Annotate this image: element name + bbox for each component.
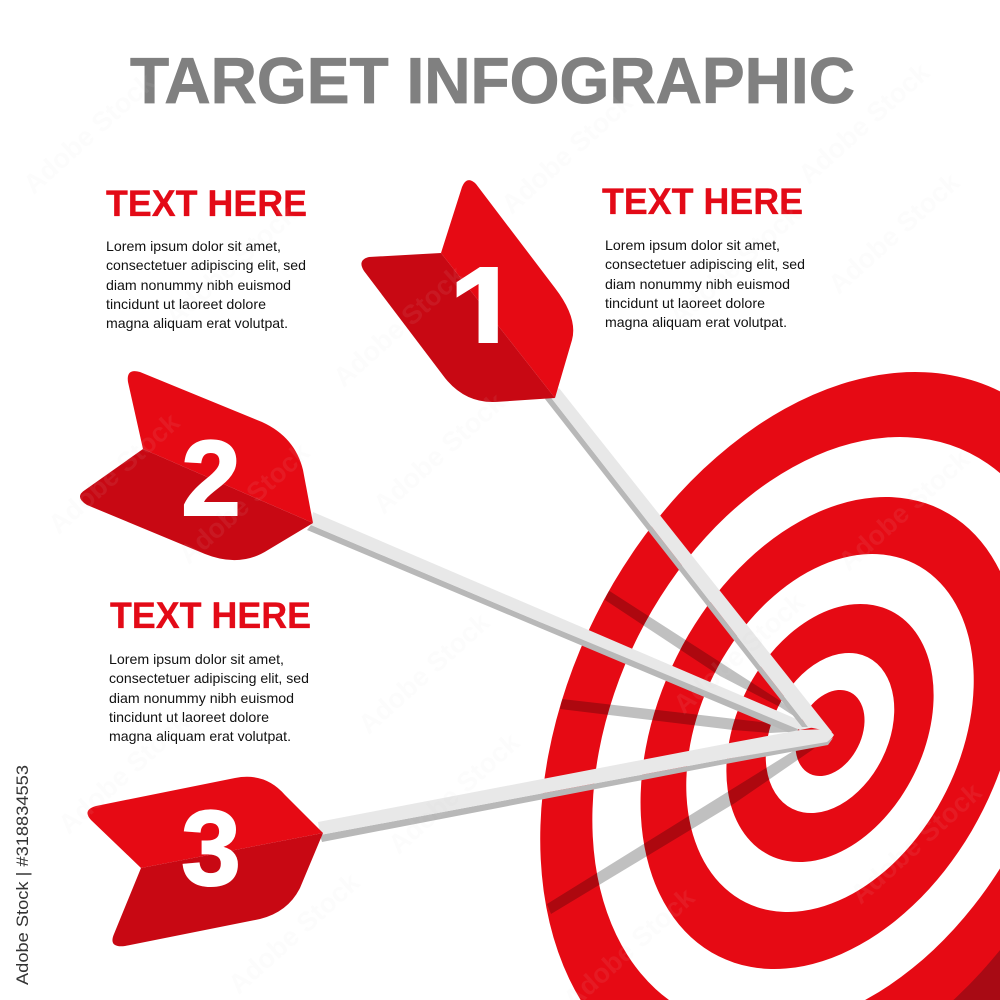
body: top left: consectetuer adipiscing elit, sed bbox=[106, 257, 306, 273]
text block: middle left bbox=[109, 594, 311, 744]
body: top left: diam nonummy nibh euismod bbox=[106, 277, 291, 293]
body: top left: magna aliquam erat volutpat. bbox=[106, 315, 288, 331]
arrow 3 bbox=[87, 729, 834, 946]
body: top left bbox=[106, 238, 306, 331]
body: middle left: diam nonummy nibh euismod bbox=[109, 690, 294, 706]
body: top right: Lorem ipsum dolor sit amet, bbox=[605, 237, 780, 253]
number 3: 3 bbox=[181, 788, 241, 908]
body: middle left: tincidunt ut laoreet dolore bbox=[109, 709, 269, 725]
watermark pattern: Adobe Stock bbox=[833, 443, 976, 577]
body: top right: magna aliquam erat volutpat. bbox=[605, 314, 787, 330]
watermark pattern: Adobe Stock bbox=[18, 66, 161, 200]
watermark pattern: Adobe Stock bbox=[173, 436, 316, 570]
watermark pattern: Adobe Stock bbox=[845, 776, 988, 910]
watermark pattern: Adobe Stock bbox=[368, 386, 511, 520]
watermark pattern: Adobe Stock bbox=[43, 406, 186, 540]
watermark pattern: Adobe Stock bbox=[328, 259, 471, 393]
stock image credit: Adobe Stock | #318834553 bbox=[13, 765, 32, 985]
watermark pattern: Adobe Stock bbox=[823, 166, 966, 300]
heading: middle left: TEXT HERE bbox=[110, 594, 311, 636]
arrow 2 fletching bbox=[80, 371, 313, 560]
text block: top right bbox=[602, 180, 805, 330]
arrow 3 fletching bbox=[87, 777, 323, 946]
arrow shadows on target bbox=[547, 590, 815, 914]
watermark pattern: Adobe Stock bbox=[53, 706, 196, 840]
arrow 1 bbox=[361, 180, 832, 732]
text block: top left bbox=[106, 182, 307, 331]
watermark pattern: Adobe Stock bbox=[160, 198, 303, 332]
arrow 2 shaft bbox=[307, 512, 815, 733]
arrow 1 shaft bbox=[545, 388, 832, 732]
body: middle left: consectetuer adipiscing elit, sed bbox=[109, 670, 309, 686]
watermark pattern: Adobe Stock bbox=[793, 56, 936, 190]
body: top left: tincidunt ut laoreet dolore bbox=[106, 296, 266, 312]
body: top right: diam nonummy nibh euismod bbox=[605, 276, 790, 292]
arrow 2 bbox=[80, 371, 815, 733]
watermark pattern: Adobe Stock bbox=[664, 198, 807, 332]
watermark pattern: Adobe Stock bbox=[223, 866, 366, 1000]
heading: top right: TEXT HERE bbox=[602, 180, 803, 222]
target board bbox=[425, 275, 1000, 1000]
body: top left: Lorem ipsum dolor sit amet, bbox=[106, 238, 281, 254]
title: TARGET INFOGRAPHIC bbox=[130, 44, 855, 117]
number 1: 1 bbox=[448, 240, 522, 388]
arrow 1 fletching bbox=[361, 180, 573, 402]
watermark pattern: Adobe Stock bbox=[668, 586, 811, 720]
watermark pattern: Adobe Stock bbox=[496, 86, 639, 220]
body: middle left: magna aliquam erat volutpat. bbox=[109, 728, 291, 744]
arrow 3 shaft bbox=[318, 729, 834, 842]
body: middle left: Lorem ipsum dolor sit amet, bbox=[109, 651, 284, 667]
number 2: 2 bbox=[181, 418, 241, 538]
watermark pattern: Adobe Stock bbox=[383, 726, 526, 860]
heading: top left: TEXT HERE bbox=[106, 182, 307, 224]
body: middle left bbox=[109, 651, 309, 744]
body: top right bbox=[605, 237, 805, 330]
watermark pattern: Adobe Stock bbox=[353, 606, 496, 740]
body: top right: tincidunt ut laoreet dolore bbox=[605, 295, 765, 311]
body: top right: consectetuer adipiscing elit, sed bbox=[605, 256, 805, 272]
